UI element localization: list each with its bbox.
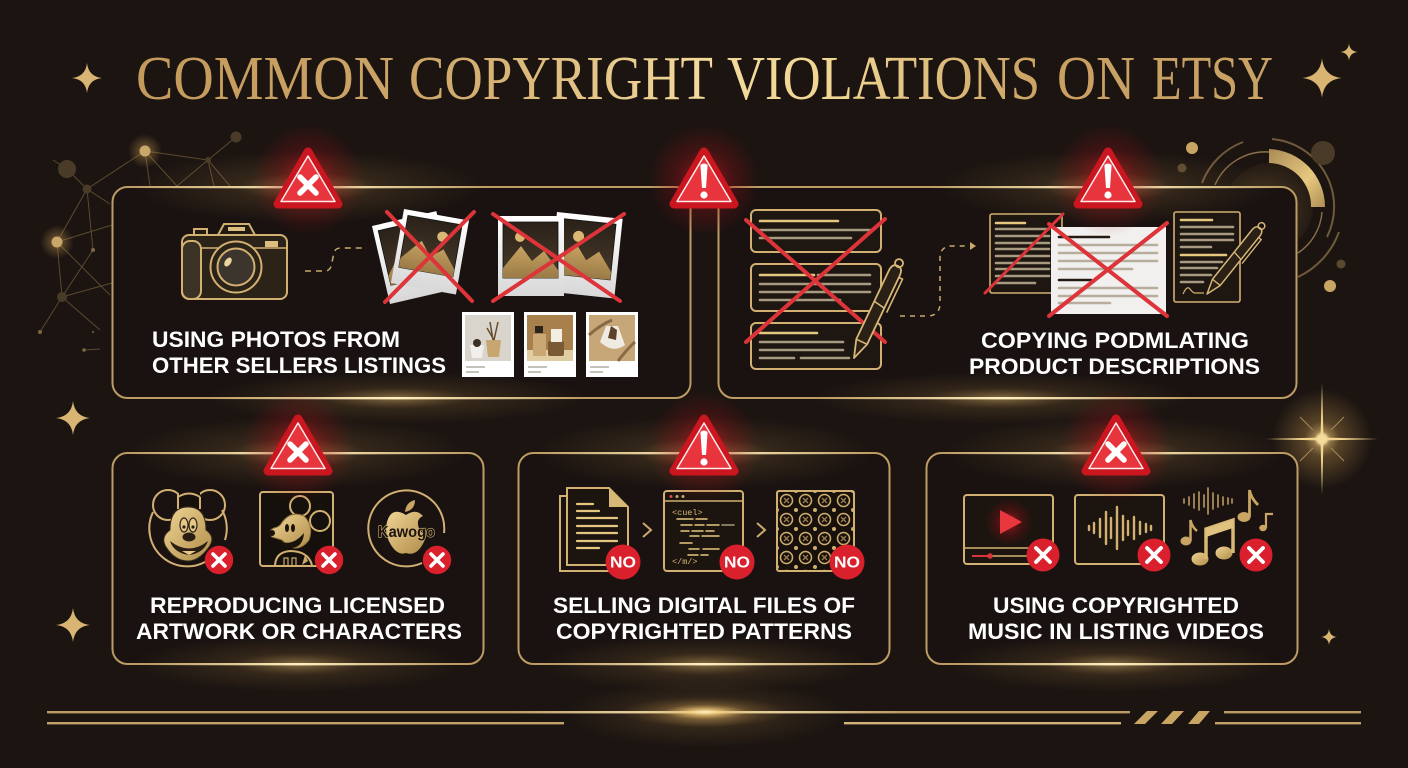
icon: video player <box>964 495 1053 564</box>
caption: COPYING PODMLATING <box>981 328 1249 353</box>
icon: document file <box>560 488 628 571</box>
caption: MUSIC IN LISTING VIDEOS <box>968 619 1264 644</box>
icon: camera <box>182 224 287 299</box>
badge: x on logo <box>423 546 451 574</box>
title: COMMON <box>136 45 394 113</box>
footer: gold divider lines with glow <box>47 680 1361 748</box>
caption <box>968 593 1264 644</box>
decoration: top right gauge arcs <box>1178 139 1346 292</box>
icon: cartoon mouse in frame <box>260 492 333 566</box>
badge: no on code: NO <box>724 554 750 572</box>
caption <box>553 593 855 644</box>
icon: fruit logo with brand name: Kawogo <box>378 524 435 541</box>
title: VIOLATIONS <box>727 45 1040 113</box>
decoration: small star lower right <box>1321 629 1337 645</box>
panel: using copyrighted music in listing videos <box>926 417 1298 692</box>
caption: PRODUCT DESCRIPTIONS <box>969 354 1260 379</box>
icon: code window: </m/> <box>672 557 698 567</box>
caption: COPYRIGHTED PATTERNS <box>556 619 852 644</box>
arrow: chevron one <box>643 523 651 537</box>
panel: using photos from other sellers listings <box>112 151 690 424</box>
arrow: chevron two <box>757 523 765 537</box>
decoration: large glowing star <box>1265 383 1378 495</box>
icon: crossed out polaroid pair <box>493 212 624 301</box>
panel: reproducing licensed artwork or characters <box>112 417 484 692</box>
badge: no on file: NO <box>610 554 636 572</box>
warning triangle: centre <box>648 124 760 236</box>
icon: code window <box>664 491 743 571</box>
icon: slashed document <box>985 214 1063 293</box>
warning triangle: panel two <box>1052 124 1164 236</box>
caption <box>969 328 1260 379</box>
panel: selling digital files of copyrighted patterns <box>518 417 890 692</box>
badge: no on code <box>720 544 754 580</box>
badge: no on pattern <box>830 544 864 580</box>
title: COPYRIGHT <box>409 45 713 113</box>
icon: repeating pattern swatch <box>777 491 854 571</box>
title: ON <box>1057 45 1135 113</box>
icon: fruit logo with brand name <box>368 490 444 566</box>
arrow: dashed connector to copied photos <box>305 248 363 271</box>
thumbnail: pots <box>462 312 514 377</box>
decoration: star top right <box>1302 58 1342 98</box>
thumbnail: boxes <box>524 312 576 377</box>
warning triangle: panel one <box>252 124 364 236</box>
icon: cartoon mouse face badge <box>149 490 227 566</box>
decoration: left constellation network <box>38 132 242 352</box>
icon: code window: <cuel> <box>672 508 703 518</box>
icon: crossed out white document <box>1049 223 1167 316</box>
caption: SELLING DIGITAL FILES OF <box>553 593 855 618</box>
decoration: star lower left <box>56 608 90 642</box>
caption <box>136 593 462 644</box>
caption: USING PHOTOS FROM <box>152 327 400 352</box>
thumbnail: textile pouch <box>586 312 638 377</box>
warning triangle: panel three <box>242 391 354 503</box>
icon: signed document with pen <box>1174 212 1270 302</box>
panel: copying product descriptions <box>718 151 1296 424</box>
badge: no on pattern: NO <box>834 554 860 572</box>
title: ETSY <box>1152 45 1273 113</box>
arrow: dashed connector to copied documents <box>900 242 976 316</box>
icon: crossed out text blocks with pen <box>746 210 910 369</box>
caption: USING COPYRIGHTED <box>993 593 1239 618</box>
decoration: star top left <box>72 63 102 93</box>
caption: ARTWORK OR CHARACTERS <box>136 619 462 644</box>
caption: REPRODUCING LICENSED <box>150 593 445 618</box>
warning triangle: panel five <box>1060 391 1172 503</box>
icon: audio waveform <box>1075 495 1164 564</box>
icon: crossed out overlapping polaroids <box>372 209 474 304</box>
decoration: small star top right <box>1340 44 1358 60</box>
badge: x on video <box>1026 538 1060 572</box>
badge: x on framed mouse <box>315 546 343 574</box>
decoration: star mid left <box>56 401 90 435</box>
badge: no on file <box>606 544 640 580</box>
icon: music notes <box>1180 488 1273 566</box>
badge: x on notes <box>1240 538 1272 572</box>
warning triangle: panel four <box>648 391 760 503</box>
caption: OTHER SELLERS LISTINGS <box>152 353 446 378</box>
badge: x on waveform <box>1138 538 1170 572</box>
title <box>136 45 1273 113</box>
caption <box>152 327 446 378</box>
badge: x on mouse face <box>205 546 233 574</box>
